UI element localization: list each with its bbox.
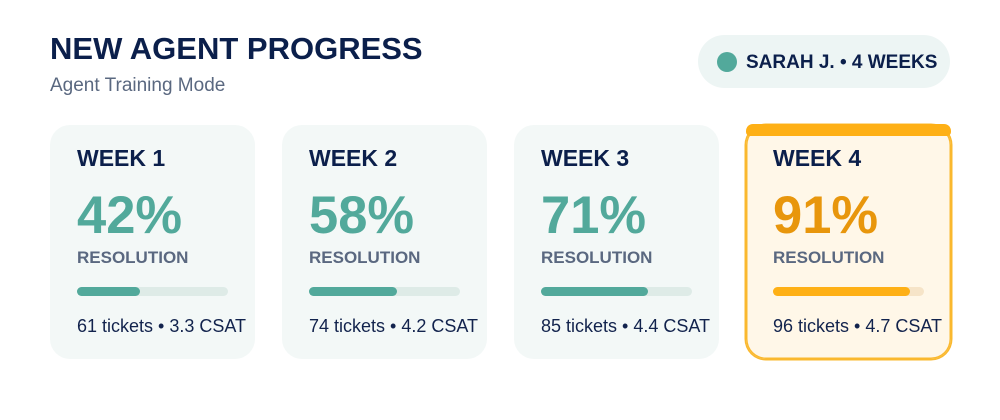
week 4 resolution label: RESOLUTION — [773, 248, 884, 266]
subtitle: Agent Training Mode — [50, 75, 225, 96]
panel: week 1 — [50, 125, 255, 359]
week 4 stats: 96 tickets • 4.7 CSAT — [773, 316, 942, 336]
week 2 resolution value: 58% — [309, 186, 414, 245]
week 2 resolution label: RESOLUTION — [309, 248, 420, 266]
week 4 resolution value: 91% — [773, 186, 878, 245]
badge text: SARAH J. • 4 WEEKS — [746, 52, 937, 73]
badge: agent name and duration — [698, 35, 950, 88]
week 3 heading: WEEK 3 — [541, 145, 629, 171]
week 2 heading: WEEK 2 — [309, 145, 397, 171]
panel: week 4 highlighted — [746, 125, 951, 359]
week 4 heading: WEEK 4 — [773, 145, 861, 171]
week 1 heading: WEEK 1 — [77, 145, 165, 171]
top accent bar — [746, 124, 951, 136]
week 4 progress bar — [773, 287, 924, 296]
title: NEW AGENT PROGRESS — [50, 31, 423, 66]
week 3 resolution label: RESOLUTION — [541, 248, 652, 266]
week 2 stats: 74 tickets • 4.2 CSAT — [309, 316, 478, 336]
week 1 resolution label: RESOLUTION — [77, 248, 188, 266]
week 1 progress bar — [77, 287, 228, 296]
panel: week 2 — [282, 125, 487, 359]
week 3 stats: 85 tickets • 4.4 CSAT — [541, 316, 710, 336]
week 1 resolution value: 42% — [77, 186, 182, 245]
week 1 stats: 61 tickets • 3.3 CSAT — [77, 316, 246, 336]
week 2 progress bar — [309, 287, 460, 296]
icon: status dot — [717, 52, 737, 72]
panel: week 3 — [514, 125, 719, 359]
week 3 progress bar — [541, 287, 692, 296]
week 3 resolution value: 71% — [541, 186, 646, 245]
